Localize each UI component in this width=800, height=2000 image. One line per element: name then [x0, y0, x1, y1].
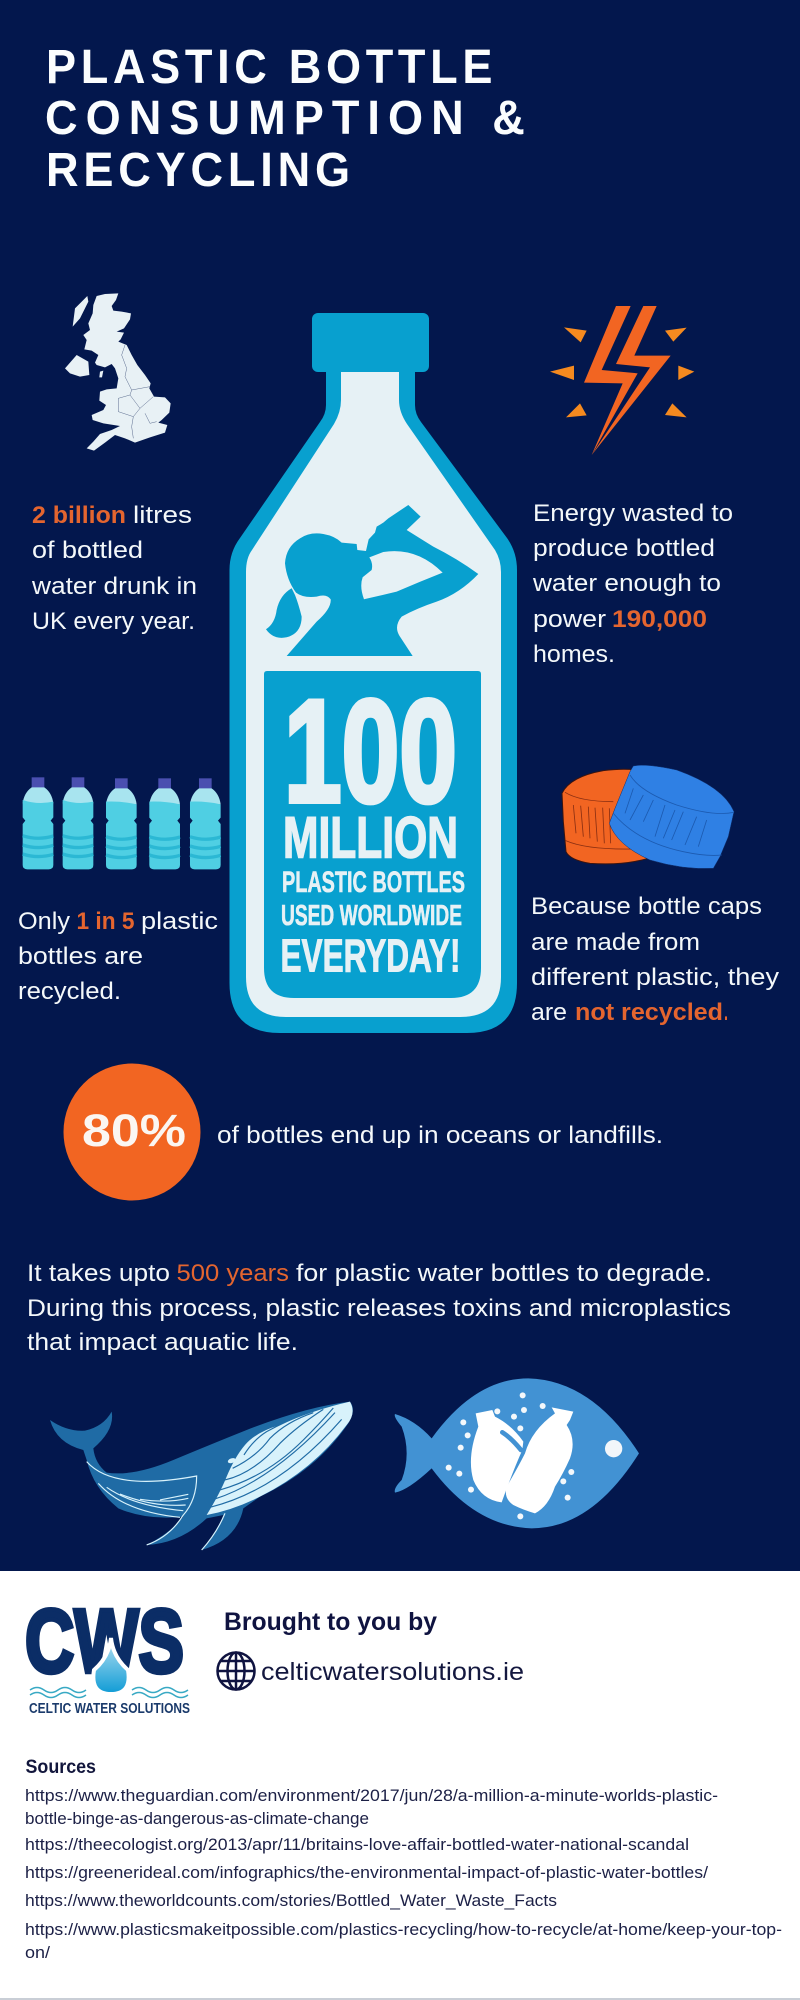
icon: UK map	[65, 293, 171, 451]
text: 2 billion litres	[31, 502, 197, 635]
icon: lightning bolt	[550, 306, 694, 455]
sources list: https://www.theworldcounts.com/stories/Bottled_Water_Waste_Facts	[25, 1892, 557, 1910]
icon: whale	[50, 1402, 353, 1550]
bolt	[584, 306, 671, 455]
text: 500 years to degrade	[27, 1260, 731, 1356]
text: 2 billion litres: litres	[133, 502, 192, 529]
text: only 1 in 5	[18, 908, 218, 1005]
bottle outline	[230, 372, 517, 1033]
waves	[30, 1688, 188, 1698]
text: 500 years to degrade: During this process, plastic releases toxins and microplastics	[27, 1295, 731, 1322]
icon: bottle caps	[562, 765, 734, 869]
label panel	[264, 671, 481, 998]
text: bottle caps not recycled	[531, 893, 779, 1026]
orange cap	[562, 769, 648, 864]
text: 2 billion litres: of bottled	[32, 537, 143, 564]
jug handle	[502, 1432, 521, 1450]
text: 2 billion litres: UK every year.	[32, 608, 195, 635]
text: only 1 in 5: 1 in 5	[76, 908, 134, 935]
bottle 2	[63, 777, 93, 869]
bottle 1	[23, 777, 53, 869]
logo: Celtic Water Solutions	[25, 1592, 190, 1717]
text: energy wasted: 190,000	[612, 606, 707, 633]
lower belly lines	[87, 1462, 225, 1550]
text: 2 billion litres: 2 billion	[32, 502, 126, 529]
text: bottles end up in oceans: of bottles end up in oceans or landfills.	[217, 1122, 663, 1149]
text: energy wasted: Energy wasted to	[533, 500, 733, 527]
text: 500 years to degrade: that impact aquatic life.	[27, 1329, 298, 1356]
text: bottle caps not recycled: are made from	[531, 929, 700, 956]
text: energy wasted	[532, 500, 733, 668]
label text: 100 million plastic bottles: 100	[284, 670, 457, 832]
icon: row of five water bottles	[23, 777, 221, 869]
text: bottle caps not recycled: different plastic, they	[531, 964, 779, 991]
bubbles	[446, 1392, 574, 1519]
belly	[207, 1402, 353, 1515]
fish eye	[605, 1440, 622, 1457]
text: only 1 in 5: recycled.	[18, 978, 121, 1005]
central bottle illustration	[230, 313, 517, 1033]
blue cap	[609, 765, 734, 869]
sources list: bottle-binge-as-dangerous-as-climate-change	[25, 1810, 369, 1828]
text: energy wasted: power	[533, 606, 606, 633]
water drop	[93, 1638, 129, 1694]
stat: 80 percent circle	[64, 1064, 200, 1200]
text: energy wasted: water enough to	[532, 570, 721, 597]
title: PLASTIC BOTTLE	[46, 40, 492, 93]
bottle cap	[312, 313, 429, 372]
logo: Celtic Water Solutions: CWS	[25, 1592, 184, 1692]
sources list	[25, 1757, 782, 1962]
bottle 4	[149, 778, 180, 869]
heading: brought to you by: Brought to you by	[224, 1608, 437, 1636]
label text: 100 million plastic bottles: MILLION	[283, 806, 458, 870]
sources list: Sources	[26, 1757, 96, 1778]
belly grooves	[210, 1408, 342, 1507]
bottle inner	[246, 372, 501, 1017]
background: navy panel	[0, 0, 800, 1571]
label text: 100 million plastic bottles: USED WORLDWIDE	[281, 900, 462, 932]
text: bottle caps not recycled: are	[531, 999, 567, 1026]
text: 2 billion litres: water drunk in	[31, 573, 197, 600]
sources list: https://www.theguardian.com/environment/2017/jun/28/a-million-a-minute-worlds-plastic-	[25, 1787, 718, 1805]
title: RECYCLING	[46, 143, 350, 196]
text: only 1 in 5: plastic	[141, 908, 218, 935]
sources list: https://greenerideal.com/infographics/the-environmental-impact-of-plastic-water-bottles/	[25, 1864, 708, 1882]
text: bottle caps not recycled: .	[724, 999, 728, 1026]
sparks	[550, 327, 694, 417]
logo: Celtic Water Solutions: CELTIC WATER SOLUTIONS	[29, 1701, 190, 1717]
label text: 100 million plastic bottles: EVERYDAY!	[280, 930, 460, 982]
panel: footer	[0, 1571, 800, 2000]
icon: woman drinking	[266, 505, 478, 656]
sources list: on/	[25, 1944, 50, 1962]
text: only 1 in 5: Only	[18, 908, 70, 935]
label text: 100 million plastic bottles: PLASTIC BOTTLES	[282, 866, 465, 899]
text: energy wasted: produce bottled	[533, 535, 715, 562]
title	[45, 40, 525, 196]
sources list: https://www.plasticsmakeitpossible.com/plastics-recycling/how-to-recycle/at-home/keep-your-top-	[25, 1921, 782, 1939]
text: 500 years to degrade: for plastic water bottles to degrade.	[296, 1260, 712, 1287]
link: website: celticwatersolutions.ie	[261, 1658, 524, 1686]
text: only 1 in 5: bottles are	[18, 943, 143, 970]
plastic jug	[471, 1410, 523, 1502]
text: 500 years to degrade: 500 years	[176, 1260, 289, 1287]
icon: fish with plastic bottles	[395, 1378, 639, 1528]
text: bottle caps not recycled: Because bottle caps	[531, 893, 762, 920]
bottle 3	[106, 778, 137, 869]
title: CONSUMPTION &	[45, 91, 525, 144]
icon: globe	[218, 1652, 254, 1690]
stat: 80 percent circle: 80%	[82, 1105, 186, 1156]
text: 500 years to degrade: It takes upto	[27, 1260, 170, 1287]
plastic bottle	[506, 1407, 573, 1513]
text: bottle caps not recycled: not recycled	[575, 999, 723, 1026]
eye	[227, 1457, 236, 1464]
label text: 100 million plastic bottles	[280, 670, 465, 982]
sources list: https://theecologist.org/2013/apr/11/britains-love-affair-bottled-water-national-scandal	[25, 1836, 689, 1854]
bottle 5	[190, 778, 221, 869]
text: energy wasted: homes.	[533, 641, 615, 668]
